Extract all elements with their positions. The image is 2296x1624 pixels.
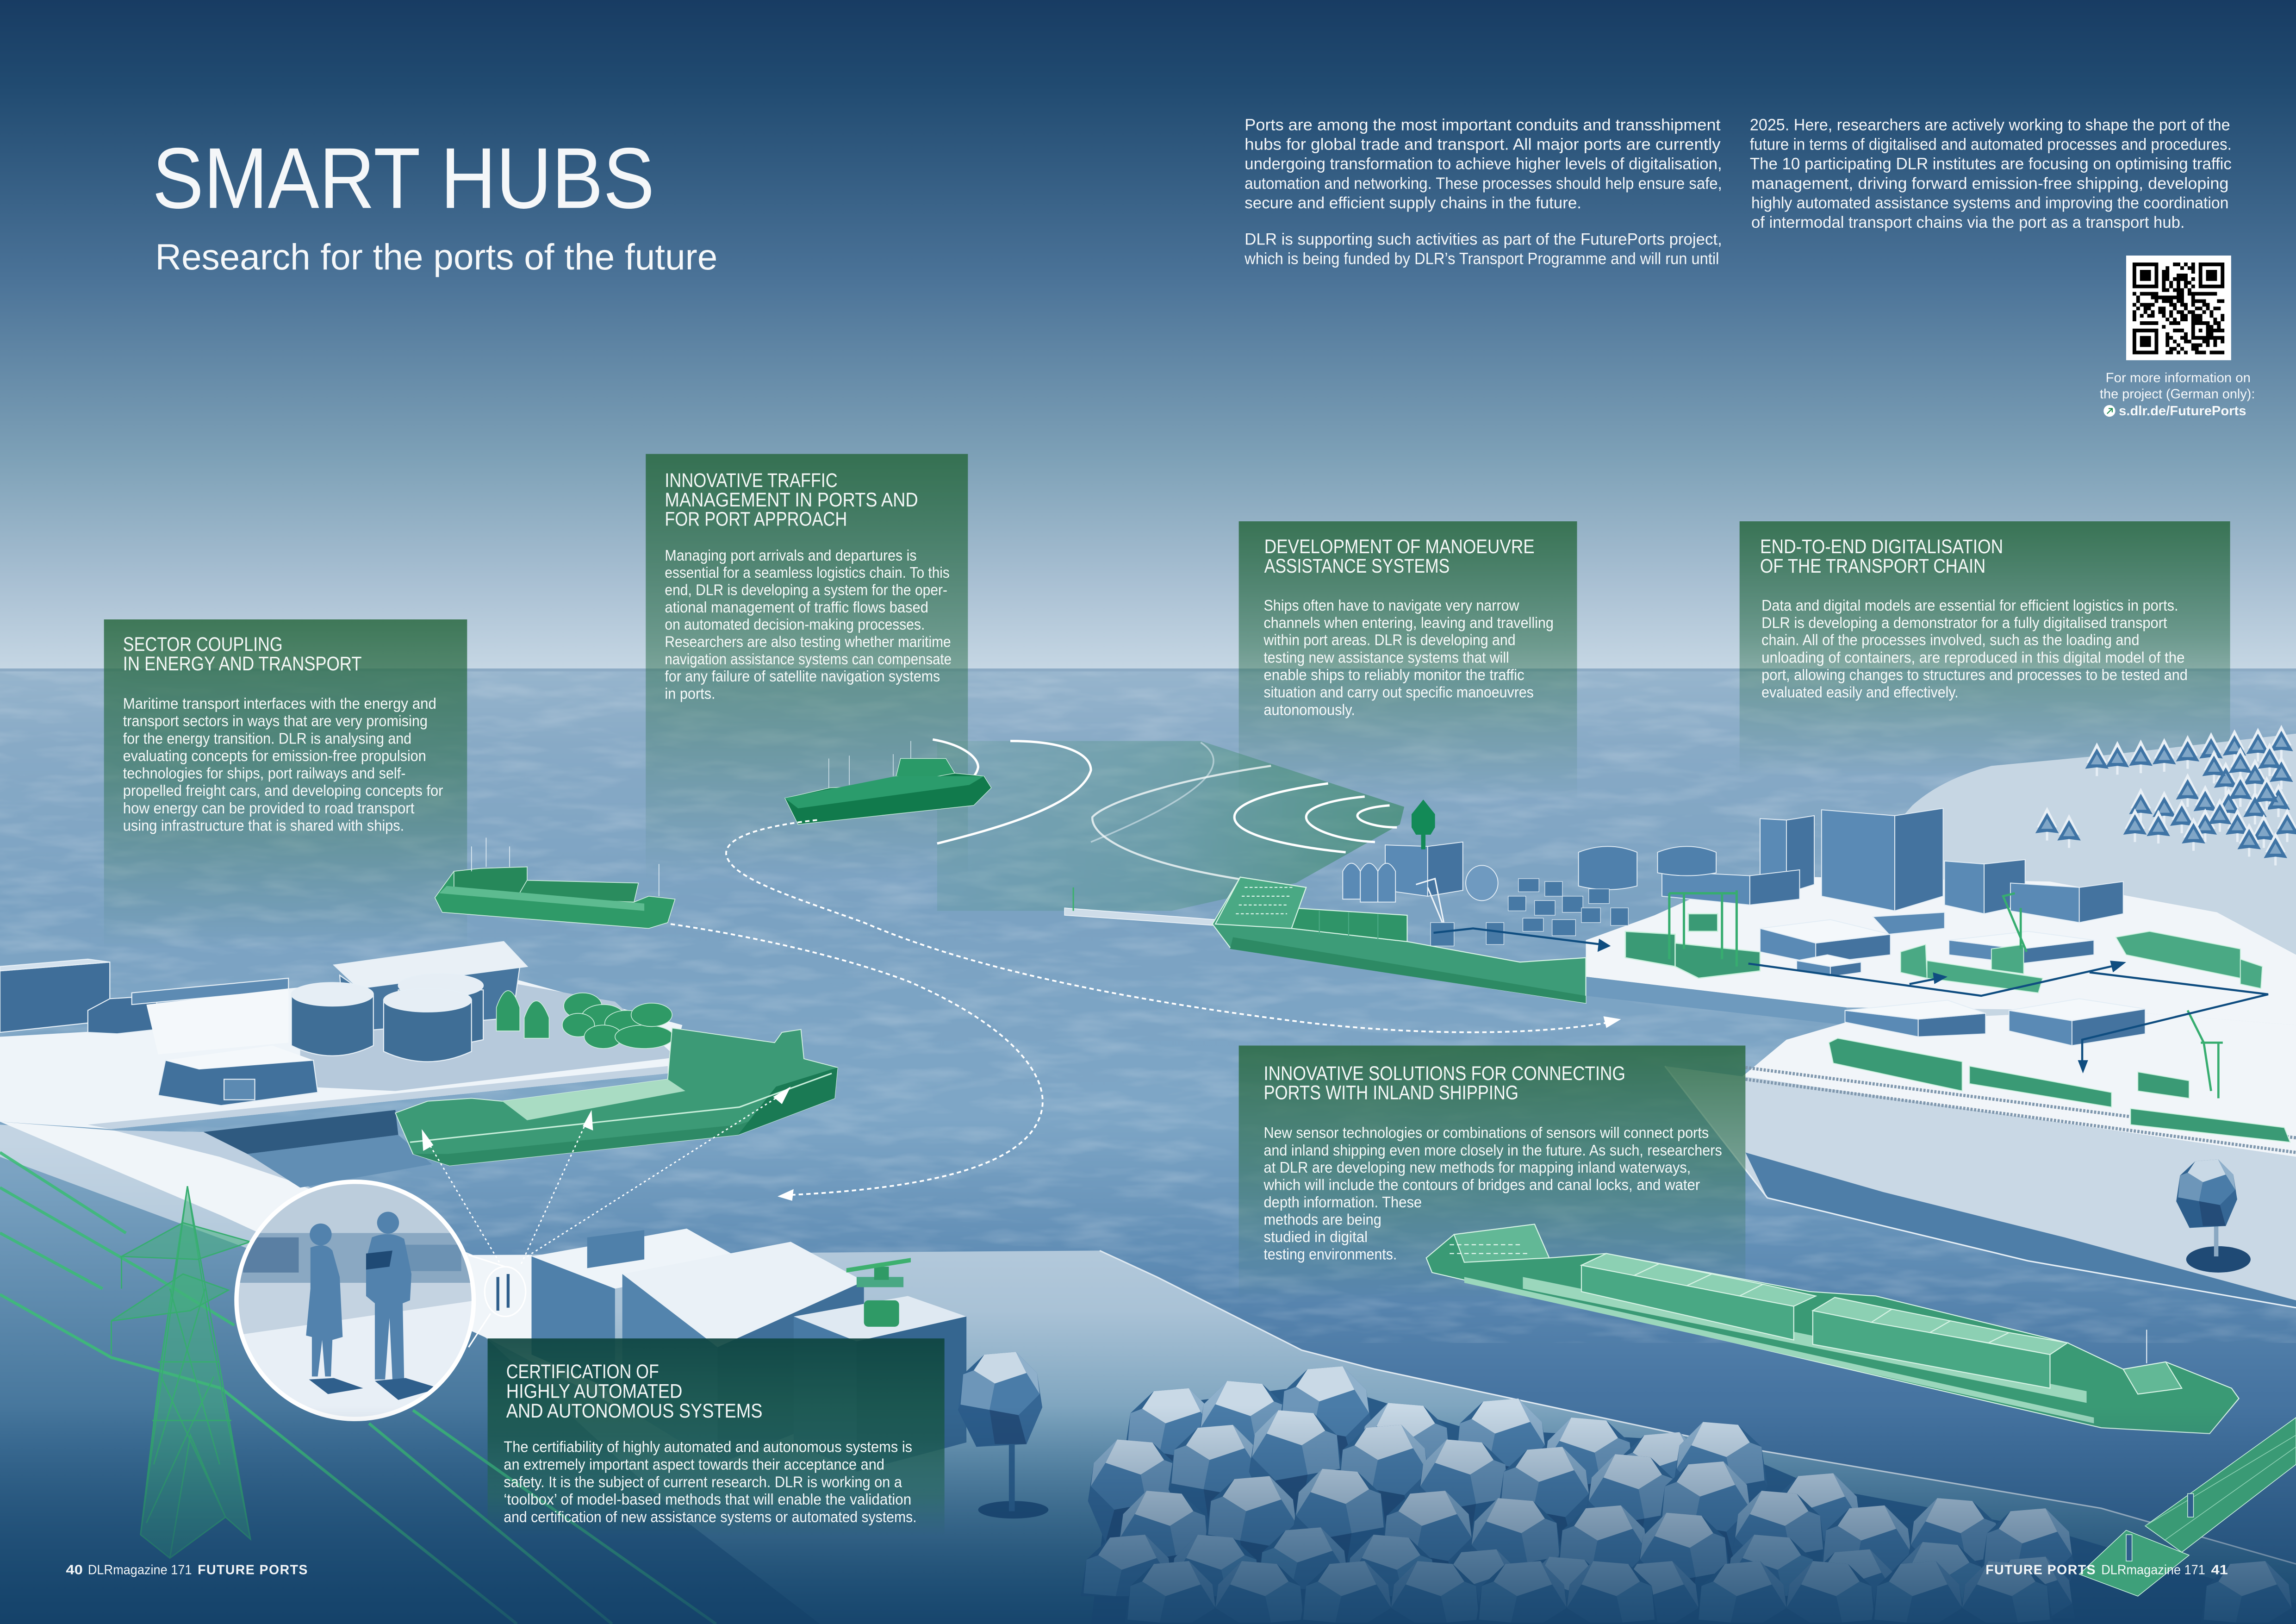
intro text column 1: hubs for global trade and transport. All major ports are currently xyxy=(1244,135,1721,154)
green hydrogen tanks xyxy=(497,991,673,1049)
terminal deck xyxy=(1586,876,2296,1025)
footer left xyxy=(66,1562,307,1577)
text: certification: safety. It is the subject of current research. DLR is working on a xyxy=(504,1474,902,1491)
panel: traffic management background xyxy=(646,454,968,879)
intro text column 1: DLR is supporting such activities as part of the FuturePorts project, xyxy=(1244,230,1722,248)
text: inland shipping: depth information. These xyxy=(1263,1193,1422,1211)
text: traffic management: INNOVATIVE TRAFFIC xyxy=(665,469,838,491)
intro text column 1: undergoing transformation to achieve higher levels of digitalisation, xyxy=(1244,155,1722,173)
terminal buildings xyxy=(1343,808,2145,1046)
sea xyxy=(0,668,2296,1624)
text: digitalisation xyxy=(1760,536,2188,701)
text: inland shipping: New sensor technologies or combinations of sensors will connect ports xyxy=(1263,1124,1709,1141)
text: traffic management xyxy=(665,469,952,702)
text: inland shipping: studied in digital xyxy=(1263,1228,1368,1245)
intro text column 2: future in terms of digitalised and automated processes and procedures. xyxy=(1750,135,2232,154)
text: traffic management: Researchers are also testing whether maritime xyxy=(665,633,951,650)
text: digitalisation: evaluated easily and effectively. xyxy=(1761,684,1959,701)
text: certification: an extremely important aspect towards their acceptance and xyxy=(504,1456,884,1473)
right pale land xyxy=(1816,734,2296,1055)
text: sector coupling: propelled freight cars, and developing concepts for xyxy=(123,782,443,799)
text: traffic management: ational management of traffic flows based xyxy=(665,599,928,616)
text: sector coupling: using infrastructure that is shared with ships. xyxy=(123,817,404,834)
radar on building xyxy=(846,1258,911,1327)
text: sector coupling: transport sectors in ways that are very promising xyxy=(123,712,428,730)
radio signal wedges xyxy=(933,739,1404,911)
text: sector coupling: technologies for ships, port railways and self- xyxy=(123,765,405,782)
footer right: DLRmagazine 171 xyxy=(2101,1562,2205,1577)
text: digitalisation: unloading of containers, are reproduced in this digital model of the xyxy=(1761,649,2185,666)
title: Research for the ports of the future xyxy=(155,236,717,277)
left pier xyxy=(0,980,682,1406)
text: manoeuvre assistance: DEVELOPMENT OF MANOEUVRE xyxy=(1264,536,1535,557)
panel: manoeuvre assistance background xyxy=(1239,521,1577,800)
QR caption: the project (German only): xyxy=(2100,387,2255,401)
forest xyxy=(1081,1366,2296,1624)
lighthouse signal mast xyxy=(1412,800,1435,849)
flow arrowheads xyxy=(1598,939,2126,1074)
footer left: FUTURE PORTS xyxy=(198,1562,307,1577)
text: sector coupling: how energy can be provided to road transport xyxy=(123,800,414,817)
rail quay and shore land xyxy=(1665,1011,2296,1308)
text: inland shipping: at DLR are developing new methods for mapping inland waterways, xyxy=(1263,1159,1691,1176)
route arrowheads xyxy=(778,1016,1621,1201)
text: manoeuvre assistance: autonomously. xyxy=(1263,701,1355,718)
title: SMART HUBS xyxy=(152,130,654,226)
power pylon xyxy=(111,1186,250,1558)
footer right xyxy=(1985,1562,2228,1577)
text: inland shipping: INNOVATIVE SOLUTIONS FOR CONNECTING xyxy=(1263,1062,1625,1084)
text: sector coupling: for the energy transition. DLR is analysing and xyxy=(123,730,411,747)
ship: pier vessel xyxy=(395,1028,838,1166)
text: certification: and certification of new assistance systems or automated systems. xyxy=(504,1508,917,1525)
text: manoeuvre assistance: ASSISTANCE SYSTEMS xyxy=(1264,555,1450,577)
text: manoeuvre assistance: channels when entering, leaving and travelling xyxy=(1263,614,1554,631)
text: digitalisation: OF THE TRANSPORT CHAIN xyxy=(1760,555,1985,577)
green gangway bridge xyxy=(2079,1418,2296,1596)
panel: inland shipping background xyxy=(1239,1046,1745,1302)
text: manoeuvre assistance: testing new assistance systems that will xyxy=(1263,649,1509,666)
small zoom source circle xyxy=(468,1255,526,1347)
ship: large port vessel xyxy=(1213,877,1586,1003)
sky background xyxy=(0,0,2296,671)
lower buildings xyxy=(531,1229,966,1472)
text: certification: HIGHLY AUTOMATED xyxy=(506,1380,682,1402)
intro text column 1 xyxy=(1244,116,1722,268)
blue logistics flow arrows xyxy=(1433,928,2268,1063)
intro text column 2 xyxy=(1750,116,2232,231)
text: manoeuvre assistance: situation and carry out specific manoeuvres xyxy=(1263,684,1534,701)
text: manoeuvre assistance: within port areas. DLR is developing and xyxy=(1263,631,1516,649)
text: manoeuvre assistance: Ships often have to navigate very narrow xyxy=(1263,597,1519,614)
title xyxy=(152,130,717,277)
intro text column 1: automation and networking. These processes should help ensure safe, xyxy=(1244,174,1722,193)
text: traffic management: end, DLR is developing a system for the oper- xyxy=(665,581,947,599)
panel: digitalisation background xyxy=(1740,521,2230,778)
text: digitalisation: DLR is developing a demonstrator for a fully digitalised transport xyxy=(1761,614,2167,631)
intro text column 1: Ports are among the most important conduits and transshipment xyxy=(1244,116,1721,134)
text: inland shipping: and inland shipping even more closely in the future. As such, researchers xyxy=(1263,1142,1722,1159)
inspection circle with people xyxy=(234,1179,476,1428)
intro text column 2: highly automated assistance systems and improving the coordination xyxy=(1751,194,2228,212)
bottom darkening xyxy=(0,1406,2296,1624)
footer left: DLRmagazine 171 xyxy=(88,1562,192,1577)
small process plant blocks xyxy=(1416,879,1628,946)
text: traffic management: navigation assistance systems can compensate xyxy=(665,650,952,668)
QR caption: For more information on xyxy=(2106,371,2251,386)
text: manoeuvre assistance: enable ships to reliably monitor the traffic xyxy=(1263,666,1524,683)
footer right: FUTURE PORTS xyxy=(1985,1562,2096,1577)
text: traffic management: essential for a seamless logistics chain. To this xyxy=(665,564,950,581)
intro text column 1: secure and efficient supply chains in the future. xyxy=(1244,194,1581,212)
text: certification: CERTIFICATION OF xyxy=(506,1361,659,1382)
text: certification xyxy=(504,1361,917,1525)
text: sector coupling xyxy=(123,633,443,834)
panel: sector coupling background xyxy=(104,619,467,949)
QR caption: s.dlr.de/FuturePorts xyxy=(2119,404,2246,418)
text: digitalisation: Data and digital models are essential for efficient logistics in ports. xyxy=(1761,597,2178,614)
text: sector coupling: Maritime transport interfaces with the energy and xyxy=(123,695,436,712)
intro text column 2: management, driving forward emission-free shipping, developing xyxy=(1751,174,2228,193)
green gantry crane and containers xyxy=(1625,890,1760,978)
text: inland shipping xyxy=(1263,1062,1722,1262)
lower land xyxy=(0,1124,2296,1624)
green freight train and rail crane xyxy=(1829,1011,2290,1142)
text: traffic management: on automated decision-making processes. xyxy=(665,616,925,633)
ship: traffic vessel xyxy=(785,741,991,824)
dotted sight lines with arrowheads xyxy=(422,1087,791,1264)
text: certification: The certifiability of highly automated and autonomous systems is xyxy=(504,1438,912,1455)
intro text column 2: of intermodal transport chains via the port as a transport hub. xyxy=(1751,213,2185,231)
intro text column 2: 2025. Here, researchers are actively working to shape the port of the xyxy=(1750,116,2230,134)
text: traffic management: in ports. xyxy=(665,685,716,702)
text: traffic management: MANAGEMENT IN PORTS AND xyxy=(665,489,918,511)
jetty xyxy=(1064,887,1215,925)
text: digitalisation: port, allowing changes to structures and processes to be tested and xyxy=(1761,666,2188,683)
text: inland shipping: PORTS WITH INLAND SHIPPING xyxy=(1263,1082,1518,1104)
intro text column 2: The 10 participating DLR institutes are focusing on optimising traffic xyxy=(1750,155,2232,173)
text: inland shipping: testing environments. xyxy=(1263,1245,1397,1262)
QR code xyxy=(2126,256,2231,360)
ship: container feeder xyxy=(435,837,675,928)
shore tree xyxy=(2176,1159,2251,1273)
text: certification: AND AUTONOMOUS SYSTEMS xyxy=(506,1400,762,1422)
panel: certification background xyxy=(488,1338,945,1536)
text: traffic management: for any failure of satellite navigation systems xyxy=(665,668,940,685)
text: manoeuvre assistance xyxy=(1263,536,1554,718)
text: sector coupling: evaluating concepts for emission-free propulsion xyxy=(123,747,426,764)
ship: inland container barge xyxy=(1426,1224,2239,1434)
text: digitalisation: chain. All of the processes involved, such as the loading and xyxy=(1761,631,2139,649)
text: sector coupling: IN ENERGY AND TRANSPORT xyxy=(123,653,361,675)
text: certification: ‘toolbox’ of model-based methods that will enable the validation xyxy=(504,1491,911,1508)
intro text column 1: which is being funded by DLR’s Transport Programme and will run until xyxy=(1244,249,1719,268)
text: inland shipping: which will include the contours of bridges and canal locks, and water xyxy=(1263,1176,1700,1193)
green cables xyxy=(0,1152,716,1624)
green trucks and crane xyxy=(1901,893,2262,993)
dashed shipping routes xyxy=(671,820,1611,1195)
text: inland shipping: methods are being xyxy=(1263,1211,1381,1228)
text: sector coupling: SECTOR COUPLING xyxy=(123,633,283,655)
text: traffic management: Managing port arrivals and departures is xyxy=(665,547,917,564)
footer right: 41 xyxy=(2211,1562,2228,1577)
left dock buildings xyxy=(0,942,527,1106)
text: digitalisation: END-TO-END DIGITALISATION xyxy=(1760,536,2003,557)
QR caption xyxy=(2100,371,2255,418)
single tree xyxy=(958,1352,1048,1518)
footer left: 40 xyxy=(66,1562,83,1577)
far trees xyxy=(2035,725,2296,865)
text: traffic management: FOR PORT APPROACH xyxy=(665,508,847,530)
